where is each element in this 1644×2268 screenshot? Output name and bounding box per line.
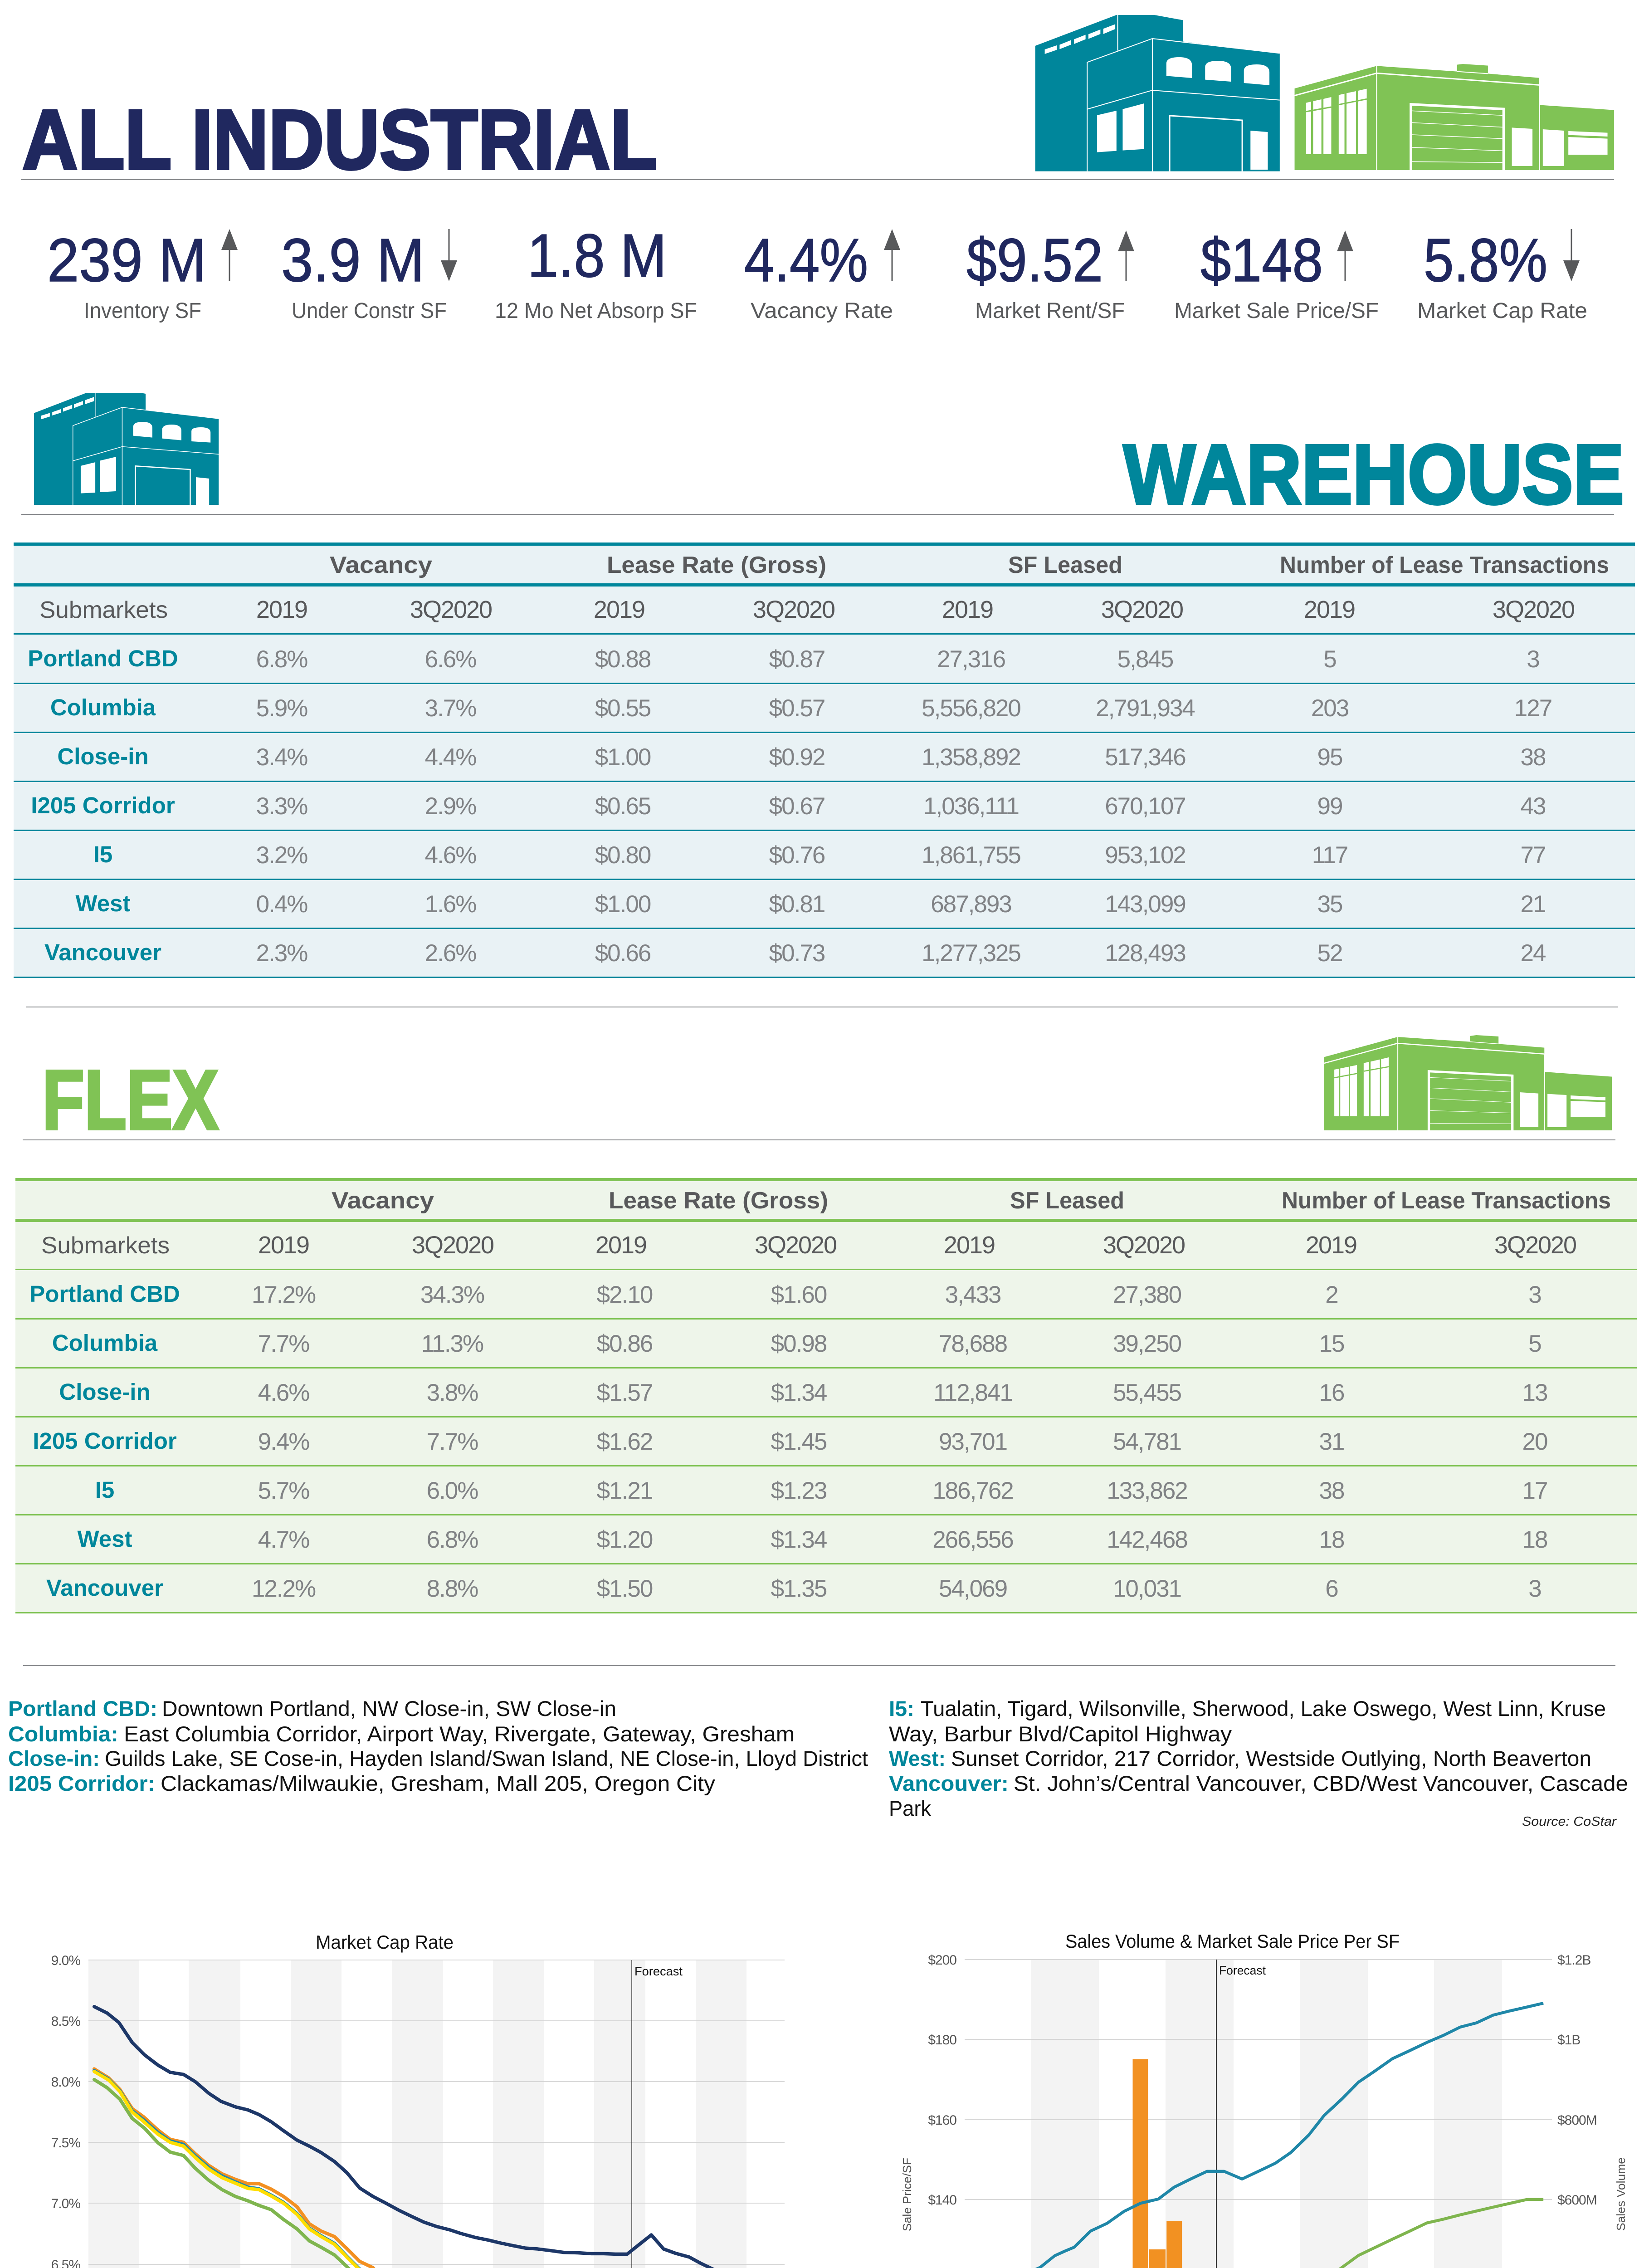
flex row: Portland CBD: Portland CBD <box>29 1281 180 1307</box>
flex table header: metric groups: Lease Rate (Gross) <box>609 1188 828 1214</box>
flex row: West: 266,556 <box>932 1526 1013 1553</box>
flex row: Columbia: 15 <box>1319 1330 1344 1357</box>
source note: Source: CoStar <box>1522 1814 1617 1829</box>
left axis labels: $200 <box>928 1953 956 1968</box>
flex table header: periods: Submarkets <box>41 1232 170 1259</box>
flex row: Portland CBD: 34.3% <box>420 1281 484 1308</box>
flex table header: periods: 2019 <box>944 1232 995 1259</box>
row: Vancouver: $0.73 <box>769 940 825 967</box>
row: I205 Corridor: 3.3% <box>256 793 307 820</box>
row: Portland CBD: 27,316 <box>937 646 1005 673</box>
text block: submarket definitions left: Guilds Lake, SE Cose-in, Hayden Island/Swan Island, NE Close-in, Lloyd District <box>105 1746 868 1770</box>
row: Columbia: $0.57 <box>769 695 824 722</box>
line: united states <box>94 2007 777 2268</box>
y axis labels: 9.0% <box>51 1953 80 1968</box>
stat: vacancy rate: 4.4% <box>744 226 868 294</box>
flex row: I5: 186,762 <box>932 1477 1013 1504</box>
text block: submarket definitions right: West: <box>889 1746 946 1770</box>
flex row: West: $1.20 <box>597 1526 653 1553</box>
line: US price per SF <box>974 2200 1543 2268</box>
chart title: Market Cap Rate <box>316 1931 454 1953</box>
flex row: West: West <box>78 1526 132 1552</box>
flex table header: periods: 3Q2020 <box>755 1232 836 1259</box>
row: Vancouver: Vancouver <box>44 939 161 965</box>
row: I5: 953,102 <box>1105 842 1185 869</box>
bars: sales volume <box>965 2059 1233 2268</box>
line: specialized <box>94 2069 777 2268</box>
row: Portland CBD: 5,845 <box>1117 646 1173 673</box>
row: Vancouver: 2.6% <box>425 940 476 967</box>
flex row: Portland CBD: 27,380 <box>1113 1281 1181 1308</box>
row: Close-in <box>57 743 1546 771</box>
row: Portland CBD <box>28 645 1539 673</box>
table header: metric groups: Number of Lease Transactions <box>1280 552 1609 578</box>
flex row: Close-in: $1.34 <box>771 1379 827 1406</box>
table header: periods: 2019 <box>942 596 993 623</box>
row: Columbia: 5,556,820 <box>922 695 1020 722</box>
row: Columbia: 203 <box>1311 695 1349 722</box>
flex row: Portland CBD: 17.2% <box>252 1281 316 1308</box>
stat: inventory: Inventory SF <box>84 299 201 323</box>
table header: metric groups: SF Leased <box>1008 552 1122 578</box>
flex row: I205 Corridor: 54,781 <box>1113 1428 1181 1455</box>
table header: periods <box>39 596 1574 623</box>
right axis labels: $800M <box>1557 2113 1597 2128</box>
flex row: I205 Corridor: I205 Corridor <box>33 1428 177 1454</box>
flex row: I205 Corridor: 7.7% <box>427 1428 478 1455</box>
stat: market rent <box>966 226 1134 323</box>
table header: metric groups: Vacancy <box>330 552 432 578</box>
y axis labels: 7.0% <box>51 2196 80 2211</box>
flex row: I5: $1.21 <box>597 1477 652 1504</box>
row: I205 Corridor: $0.65 <box>595 793 651 820</box>
row: West: 687,893 <box>931 891 1011 918</box>
row: Columbia: 3.7% <box>425 695 476 722</box>
text block: submarket definitions right: Sunset Corridor, 217 Corridor, Westside Outlying, North Beaverton <box>951 1746 1591 1770</box>
flex row: West: 6.8% <box>427 1526 478 1553</box>
row: West: 143,099 <box>1105 891 1185 918</box>
table header: metric groups: Lease Rate (Gross) <box>607 552 826 578</box>
row: Portland CBD: Portland CBD <box>28 645 178 671</box>
table: flex <box>15 1178 1637 1613</box>
stat: net absorption <box>495 221 697 323</box>
row: Portland CBD: 6.8% <box>256 646 307 673</box>
stat: under construction: Under Constr SF <box>292 299 447 323</box>
stat: market sale price: Market Sale Price/SF <box>1174 299 1379 323</box>
flex divider <box>23 1139 1615 1140</box>
row: I205 Corridor: $0.67 <box>769 793 824 820</box>
icon: large green flex building <box>1295 64 1614 170</box>
left axis labels: $140 <box>928 2193 956 2208</box>
text block: submarket definitions left: Clackamas/Milwaukie, Gresham, Mall 205, Oregon City <box>161 1771 716 1795</box>
flex row: Close-in: 3.8% <box>427 1379 478 1406</box>
heading: Flex: FLEX <box>42 1053 219 1147</box>
flex row: Columbia: 5 <box>1528 1330 1541 1357</box>
row: I5: 77 <box>1521 842 1545 869</box>
chart title: Sales Volume & Market Sale Price Per SF <box>1065 1931 1400 1952</box>
row: I5 <box>93 841 1545 869</box>
stat: market rent: $9.52 <box>966 226 1103 294</box>
stat: market sale price <box>1174 226 1379 323</box>
row: West: 0.4% <box>256 891 307 918</box>
flex table header: metric groups: SF Leased <box>1010 1188 1124 1214</box>
flex row: Close-in <box>59 1379 1547 1406</box>
row: Columbia: 127 <box>1514 695 1551 722</box>
flex row: I205 Corridor: 20 <box>1522 1428 1547 1455</box>
flex row: I205 Corridor: $1.62 <box>597 1428 652 1455</box>
flex row: Close-in: 13 <box>1522 1379 1547 1406</box>
flex row: I205 Corridor <box>33 1428 1547 1455</box>
table header: periods: 3Q2020 <box>1493 596 1574 623</box>
flex row: Vancouver: 6 <box>1325 1575 1338 1602</box>
row: I5: 4.6% <box>425 842 476 869</box>
flex table header: periods: 3Q2020 <box>1494 1232 1576 1259</box>
flex row: Close-in: $1.57 <box>597 1379 652 1406</box>
axis title: sale price: Sale Price/SF <box>900 2158 914 2231</box>
left axis labels <box>928 1953 956 2268</box>
row: Vancouver: 24 <box>1521 940 1546 967</box>
flex row: Vancouver: 12.2% <box>252 1575 316 1602</box>
flex table header: periods: 3Q2020 <box>1103 1232 1185 1259</box>
flex row: Vancouver: $1.35 <box>771 1575 827 1602</box>
flex row: I205 Corridor: 9.4% <box>258 1428 309 1455</box>
row: West <box>76 890 1545 918</box>
flex row: West: 142,468 <box>1107 1526 1187 1553</box>
row: Close-in: 95 <box>1317 744 1342 771</box>
row: Close-in: 38 <box>1521 744 1546 771</box>
row: Columbia: $0.55 <box>595 695 651 722</box>
row: I5: $0.80 <box>595 842 651 869</box>
text block: submarket definitions left: East Columbia Corridor, Airport Way, Rivergate, Gateway, Gresham <box>124 1722 795 1746</box>
row: Portland CBD: 3 <box>1527 646 1539 673</box>
row: I5: 1,861,755 <box>922 842 1020 869</box>
warehouse divider <box>21 514 1614 515</box>
flex row: Portland CBD: $2.10 <box>597 1281 653 1308</box>
stat: market cap rate: Market Cap Rate <box>1417 299 1587 323</box>
row: I205 Corridor: I205 Corridor <box>31 792 175 818</box>
row: Close-in: 3.4% <box>256 744 307 771</box>
flex row: Close-in: 16 <box>1319 1379 1344 1406</box>
flex row: West: 18 <box>1319 1526 1344 1553</box>
text block: submarket definitions right: Park <box>889 1796 931 1820</box>
table header: periods: 3Q2020 <box>410 596 492 623</box>
row: I5: 3.2% <box>256 842 307 869</box>
table header: periods: 2019 <box>256 596 307 623</box>
flex row: Vancouver: $1.50 <box>597 1575 653 1602</box>
flex row: Vancouver: Vancouver <box>46 1575 163 1601</box>
stat: vacancy rate: Vacancy Rate <box>751 299 893 323</box>
table header: periods: Submarkets <box>39 597 168 623</box>
right axis labels: $1.2B <box>1557 1953 1590 1968</box>
row: Columbia <box>50 694 1551 722</box>
flex table header: periods: 3Q2020 <box>412 1232 493 1259</box>
row: Vancouver: 1,277,325 <box>922 940 1020 967</box>
right axis labels <box>1557 1953 1597 2268</box>
right axis labels: $1B <box>1557 2033 1580 2048</box>
stats row <box>47 221 1587 323</box>
row: Columbia: Columbia <box>50 694 156 720</box>
row: Portland CBD: $0.87 <box>769 646 824 673</box>
row: West: West <box>76 890 130 916</box>
stat: under construction <box>281 226 457 323</box>
flex row: West: 18 <box>1522 1526 1547 1553</box>
flex row: Columbia: Columbia <box>52 1330 158 1356</box>
table header: periods: 3Q2020 <box>753 596 834 623</box>
stat: market sale price: $148 <box>1200 226 1323 294</box>
row: I205 Corridor: 43 <box>1521 793 1546 820</box>
right axis labels: $600M <box>1557 2193 1597 2208</box>
section divider above submarket key <box>23 1665 1615 1666</box>
row: West: $1.00 <box>595 891 651 918</box>
line: flex <box>94 2080 777 2268</box>
table: warehouse <box>14 543 1635 978</box>
text block: submarket definitions left: Downtown Portland, NW Close-in, SW Close-in <box>162 1696 616 1721</box>
flex row: Portland CBD: 2 <box>1325 1281 1338 1308</box>
flex row: Close-in: 112,841 <box>933 1379 1012 1406</box>
row: Vancouver: $0.66 <box>595 940 651 967</box>
row: Portland CBD: 6.6% <box>425 646 476 673</box>
row: I5: I5 <box>93 841 112 867</box>
text block: submarket definitions left <box>8 1696 868 1795</box>
flex row: Columbia: 7.7% <box>258 1330 309 1357</box>
row: I5: 117 <box>1312 842 1347 869</box>
stat: net absorption: 1.8 M <box>527 221 667 290</box>
text block: submarket definitions right: St. John’s/Central Vancouver, CBD/West Vancouver, Cascade <box>1014 1771 1628 1795</box>
flex row: West: 4.7% <box>258 1526 309 1553</box>
text block: submarket definitions right: Vancouver: <box>889 1771 1009 1795</box>
stat: under construction: 3.9 M <box>281 226 424 294</box>
y axis labels <box>51 1953 80 2268</box>
flex row: Columbia: $0.98 <box>771 1330 827 1357</box>
chart: sales volume and market sale price per SF <box>900 1931 1628 2268</box>
line: logistics <box>94 2071 777 2268</box>
flex row: I205 Corridor: 31 <box>1319 1428 1344 1455</box>
flex row: I5: 133,862 <box>1107 1477 1187 1504</box>
flex table header: periods: 2019 <box>258 1232 309 1259</box>
row: Vancouver: 128,493 <box>1105 940 1185 967</box>
row: Portland CBD: $0.88 <box>595 646 651 673</box>
flex row: I5: $1.23 <box>771 1477 827 1504</box>
flex row: Portland CBD: 3 <box>1528 1281 1541 1308</box>
flex row: Vancouver: 3 <box>1528 1575 1541 1602</box>
stat: inventory <box>47 226 238 323</box>
table header: periods: 2019 <box>594 596 644 623</box>
row: I205 Corridor <box>31 792 1546 820</box>
text block: submarket definitions left: Columbia: <box>8 1722 118 1746</box>
stat: vacancy rate <box>744 226 900 323</box>
stat: net absorption: 12 Mo Net Absorp SF <box>495 299 697 323</box>
left axis labels: $160 <box>928 2113 956 2128</box>
row: Vancouver: 52 <box>1317 940 1342 967</box>
flex row: Portland CBD: $1.60 <box>771 1281 827 1308</box>
table header: periods: 3Q2020 <box>1101 596 1183 623</box>
text block: submarket definitions left: Portland CBD: <box>8 1696 157 1721</box>
flex row: I205 Corridor: 93,701 <box>939 1428 1007 1455</box>
row: Close-in: 4.4% <box>425 744 476 771</box>
icon: large teal warehouse building <box>1035 15 1280 171</box>
row: I5: $0.76 <box>769 842 825 869</box>
row: Columbia: 5.9% <box>256 695 307 722</box>
row: I205 Corridor: 1,036,111 <box>923 793 1019 820</box>
row: I205 Corridor: 670,107 <box>1105 793 1185 820</box>
flex row: I5: I5 <box>95 1477 114 1503</box>
flex row: Close-in: 4.6% <box>258 1379 309 1406</box>
y axis labels: 8.5% <box>51 2014 80 2029</box>
flex row: I5 <box>95 1477 1547 1504</box>
stat: market rent: Market Rent/SF <box>975 299 1125 323</box>
line: portland <box>94 2072 777 2268</box>
y axis labels: 7.5% <box>51 2136 80 2151</box>
flex row: I5: 5.7% <box>258 1477 309 1504</box>
flex row: Vancouver: 10,031 <box>1113 1575 1181 1602</box>
row: Columbia: 2,791,934 <box>1096 695 1195 722</box>
text block: submarket definitions left: Close-in: <box>8 1746 100 1770</box>
flex row: Vancouver: 54,069 <box>939 1575 1007 1602</box>
flex table header: metric groups: Vacancy <box>332 1188 434 1214</box>
flex row: Close-in: Close-in <box>59 1379 151 1405</box>
flex row: Columbia: 11.3% <box>421 1330 483 1357</box>
flex table header: periods: 2019 <box>1306 1232 1356 1259</box>
flex row: Vancouver <box>46 1575 1541 1602</box>
line: price per SF <box>974 2003 1543 2268</box>
header divider <box>21 179 1614 180</box>
flex table header: metric groups: Number of Lease Transactions <box>1282 1188 1611 1214</box>
row: West: 1.6% <box>425 891 476 918</box>
text block: submarket definitions left: I205 Corridor: <box>8 1771 155 1795</box>
icon: small green flex building <box>1324 1035 1612 1130</box>
flex row: Close-in: 55,455 <box>1113 1379 1181 1406</box>
text block: submarket definitions right <box>889 1696 1628 1820</box>
text block: submarket definitions right: Tualatin, Tigard, Wilsonville, Sherwood, Lake Oswego, West Linn, Kruse <box>921 1696 1606 1721</box>
row: West: 35 <box>1317 891 1342 918</box>
flex row: Portland CBD <box>29 1281 1541 1308</box>
flex row: West <box>78 1526 1547 1553</box>
flex row: Columbia <box>52 1330 1541 1357</box>
row: Close-in: Close-in <box>57 743 149 769</box>
table header: metric groups <box>330 552 1609 578</box>
row: Vancouver <box>44 939 1546 967</box>
row: Close-in: $0.92 <box>769 744 824 771</box>
data lines <box>94 2007 777 2268</box>
flex row: I5: 6.0% <box>427 1477 478 1504</box>
forecast marker: Forecast <box>634 1965 683 1978</box>
left axis labels: $180 <box>928 2033 956 2048</box>
flex row: I5: 38 <box>1319 1477 1344 1504</box>
axis title: sales volume: Sales Volume <box>1614 2157 1628 2231</box>
stat: market cap rate: 5.8% <box>1424 226 1547 294</box>
flex table header: metric groups <box>332 1188 1611 1214</box>
stat: inventory: 239 M <box>47 226 206 294</box>
row: West: 21 <box>1521 891 1545 918</box>
row: I205 Corridor: 2.9% <box>425 793 476 820</box>
text block: submarket definitions right: Way, Barbur Blvd/Capitol Highway <box>889 1722 1232 1746</box>
flex row: Columbia: 78,688 <box>939 1330 1007 1357</box>
flex row: Vancouver: 8.8% <box>427 1575 478 1602</box>
icon: small teal warehouse building <box>34 393 219 505</box>
flex row: Portland CBD: 3,433 <box>945 1281 1001 1308</box>
flex row: I205 Corridor: $1.45 <box>771 1428 827 1455</box>
text block: submarket definitions right: I5: <box>889 1696 914 1721</box>
chart: market cap rate <box>51 1931 785 2268</box>
flex table header: periods: 2019 <box>595 1232 646 1259</box>
flex table header: periods <box>41 1232 1576 1259</box>
forecast marker: Forecast <box>1219 1964 1266 1977</box>
row: Vancouver: 2.3% <box>256 940 307 967</box>
row: Close-in: 1,358,892 <box>922 744 1020 771</box>
stat: market cap rate <box>1417 226 1587 323</box>
data lines <box>974 2003 1543 2268</box>
row: I205 Corridor: 99 <box>1317 793 1342 820</box>
row: Close-in: 517,346 <box>1105 744 1185 771</box>
table header: periods: 2019 <box>1304 596 1355 623</box>
flex row: Columbia: 39,250 <box>1113 1330 1181 1357</box>
row: Close-in: $1.00 <box>595 744 651 771</box>
row: West: $0.81 <box>769 891 824 918</box>
flex row: West: $1.34 <box>771 1526 827 1553</box>
flex row: I5: 17 <box>1522 1477 1547 1504</box>
row: Portland CBD: 5 <box>1323 646 1336 673</box>
y axis labels: 8.0% <box>51 2075 80 2090</box>
flex row: Columbia: $0.86 <box>597 1330 653 1357</box>
title: All Industrial: ALL INDUSTRIAL <box>22 93 657 187</box>
